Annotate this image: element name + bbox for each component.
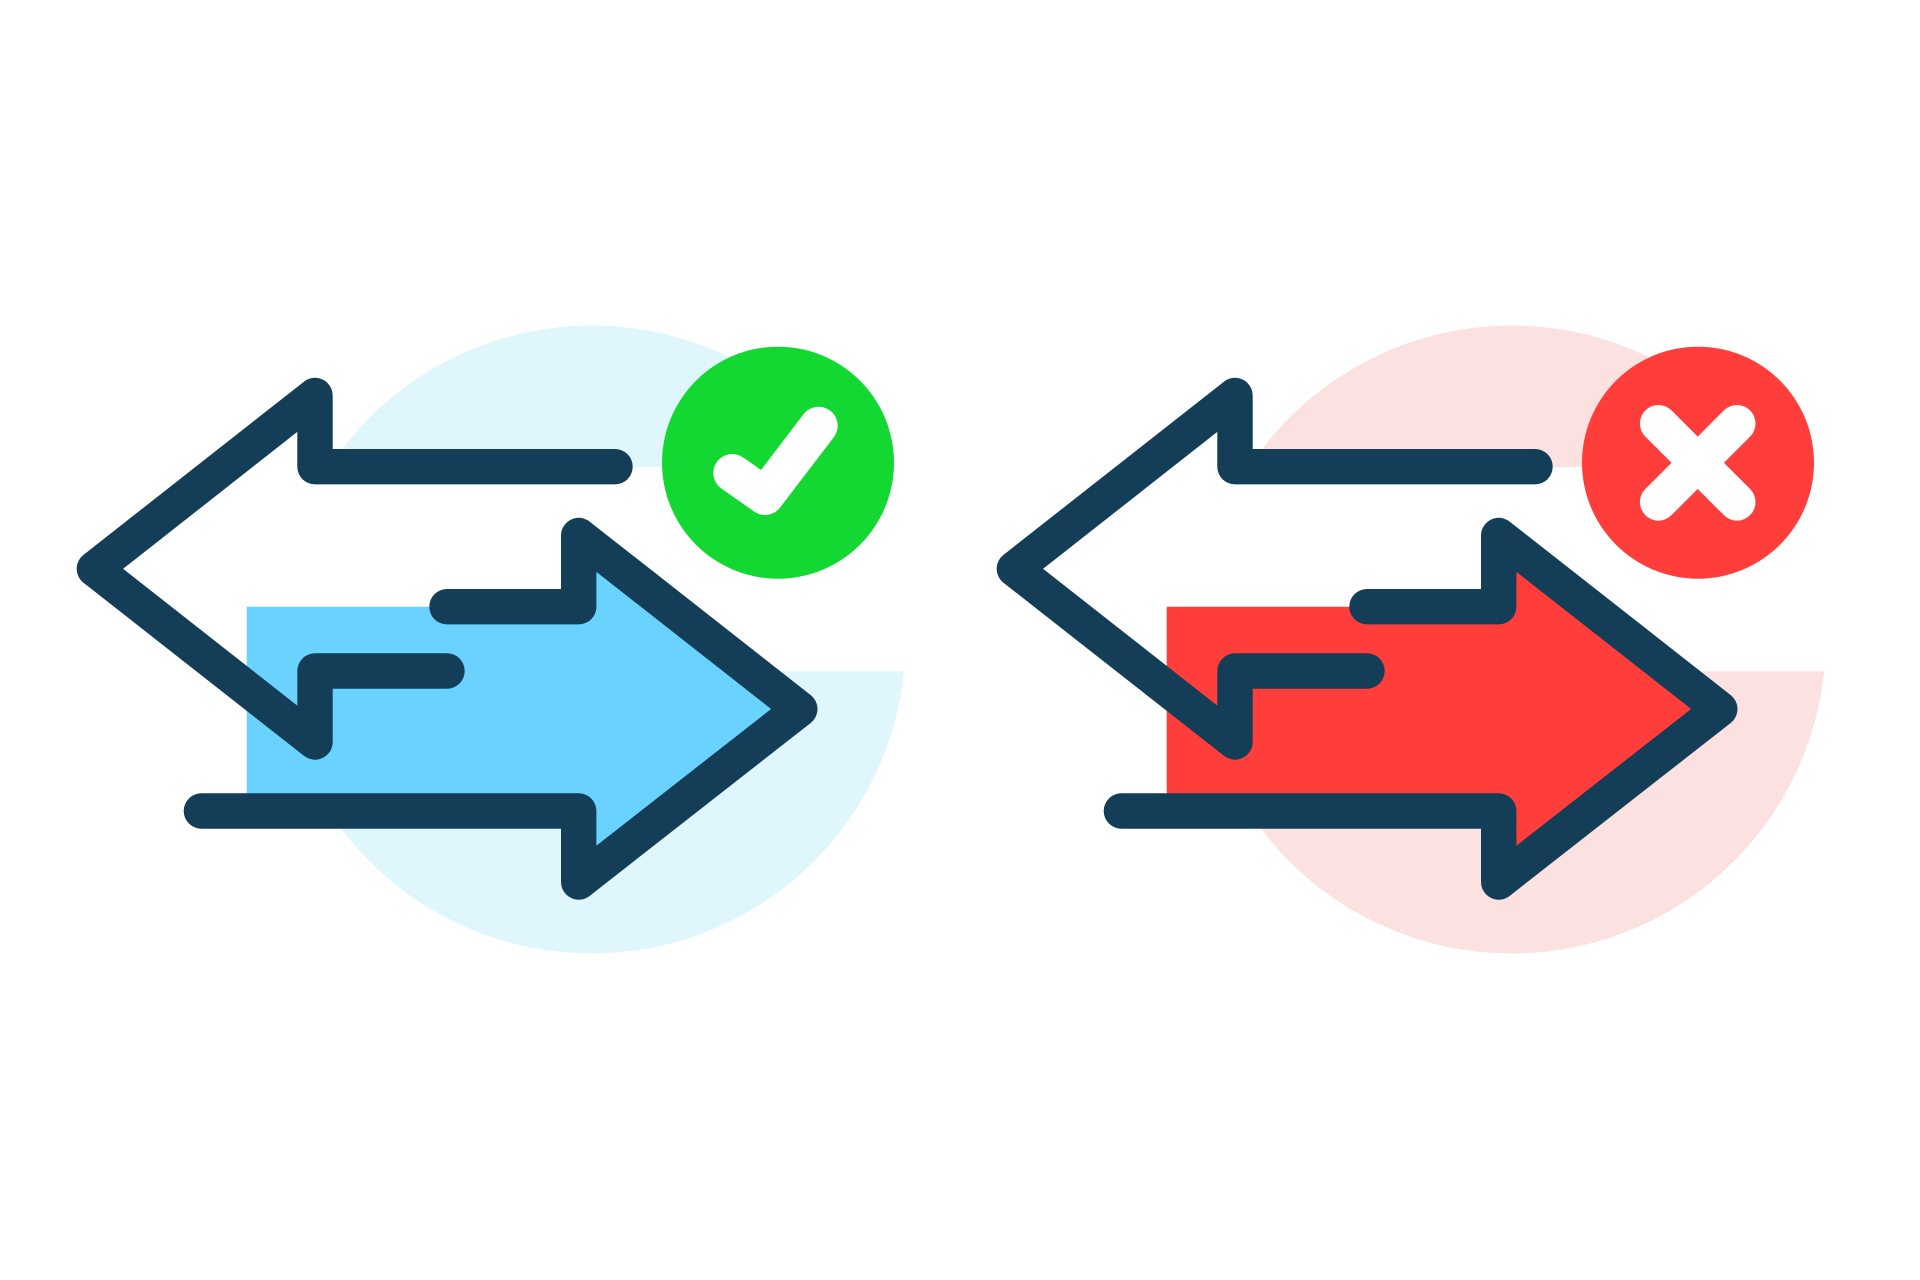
arrow: right outline bbox=[1121, 536, 1720, 882]
icon: red cross badge bbox=[1582, 347, 1814, 579]
pale red background circle bbox=[1198, 326, 1826, 954]
white band behind the arrows bbox=[1120, 467, 1840, 671]
panel: correct transfer icon bbox=[94, 326, 920, 954]
icon: green check badge bbox=[662, 347, 894, 579]
red right arrow fill bbox=[1167, 536, 1720, 882]
white band behind the arrows bbox=[200, 467, 920, 671]
arrow: left outline bbox=[94, 396, 615, 742]
arrow: left outline bbox=[1014, 396, 1535, 742]
pale blue background circle bbox=[278, 326, 906, 954]
blue right arrow fill bbox=[247, 536, 800, 882]
arrow: right outline bbox=[201, 536, 800, 882]
white check mark bbox=[732, 426, 819, 496]
white cross mark bbox=[1658, 424, 1737, 502]
panel: incorrect transfer icon bbox=[1014, 326, 1840, 954]
green badge circle bbox=[662, 347, 894, 579]
red badge circle bbox=[1582, 347, 1814, 579]
